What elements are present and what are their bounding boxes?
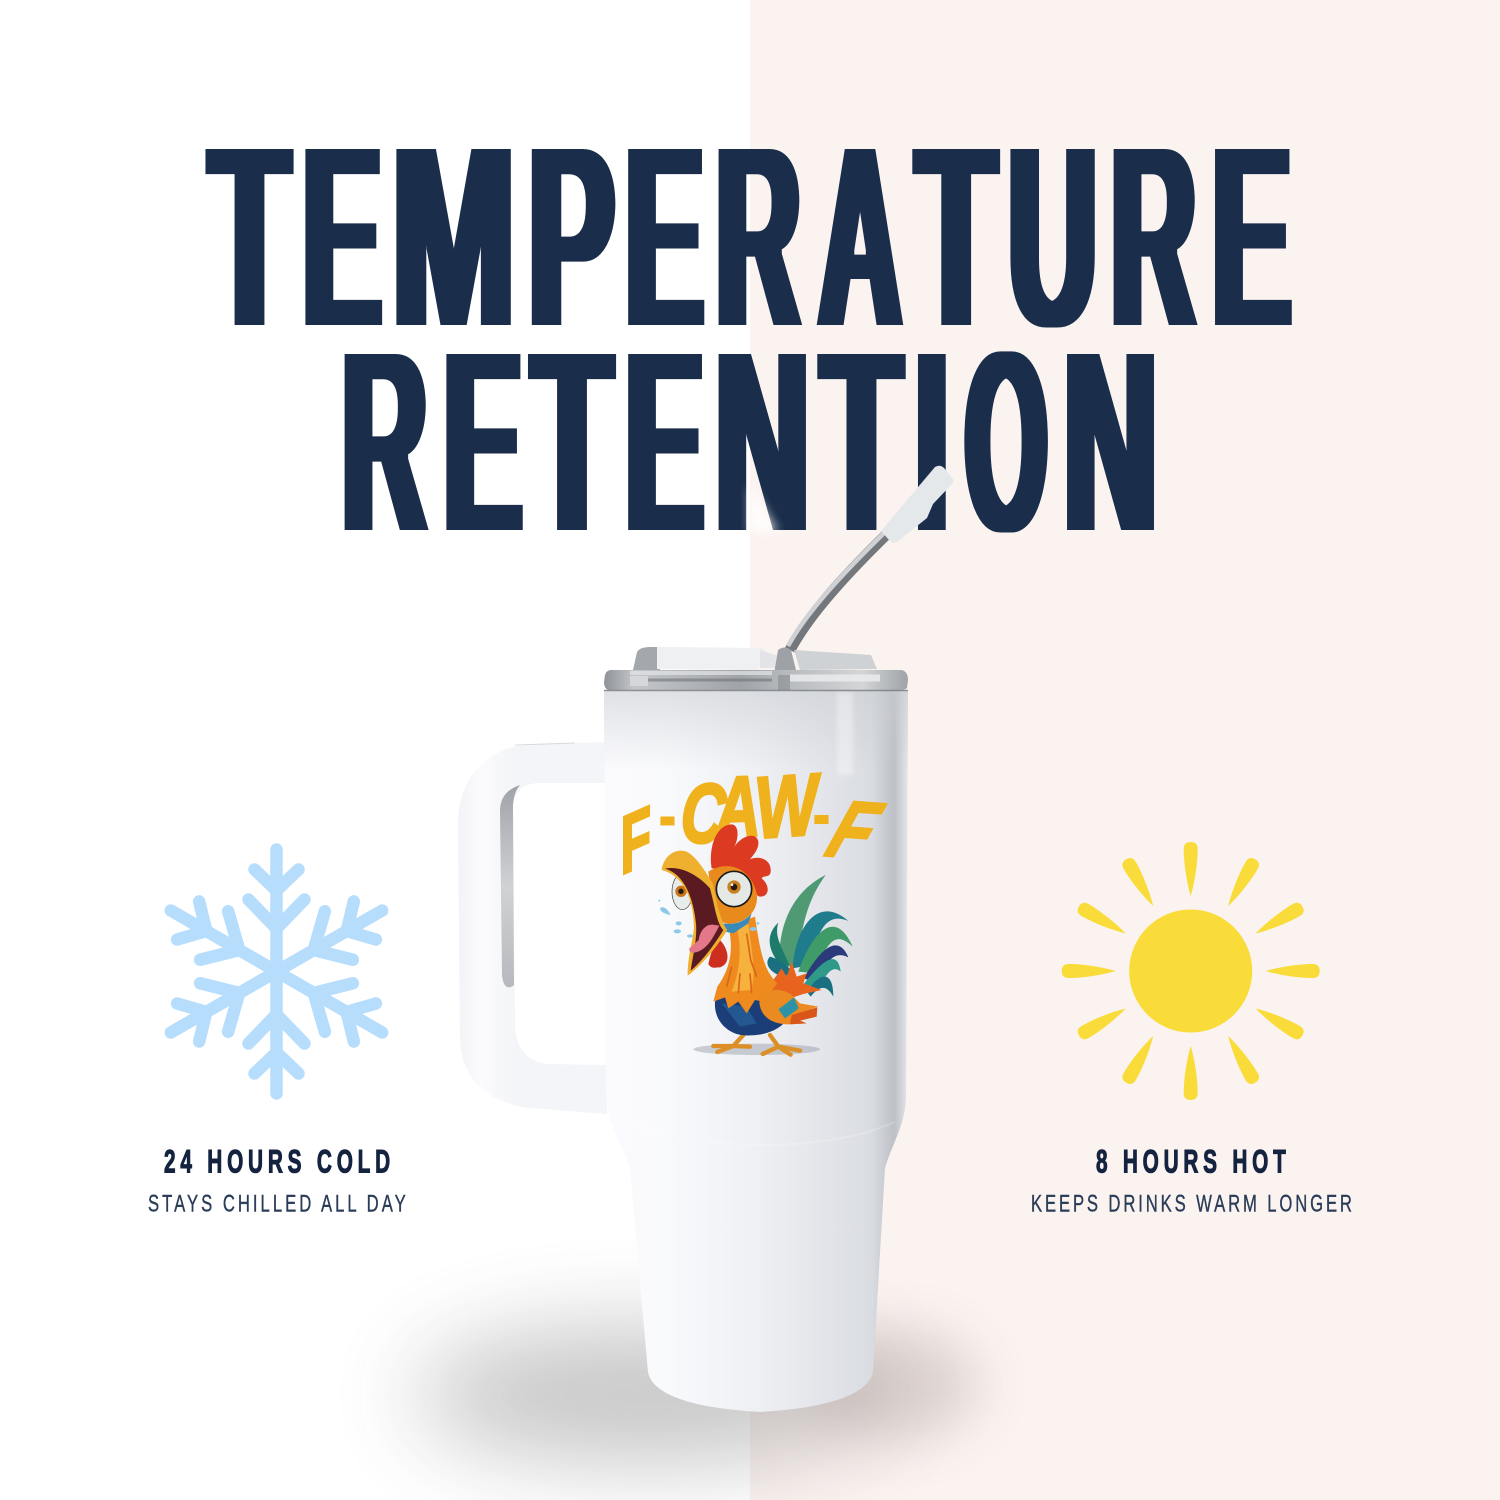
title line 1: E (1213, 91, 1291, 382)
body (604, 690, 908, 1412)
icon: sun (1062, 842, 1320, 1100)
title line 2: O (966, 297, 1047, 588)
beak and mouth (662, 851, 727, 976)
faded patch on the N (750, 485, 778, 532)
tumbler (458, 466, 953, 1412)
title line 2: E (626, 295, 703, 588)
icon: snowflake (157, 850, 396, 1094)
title line 2: T (532, 296, 612, 588)
title line 1: T (916, 90, 996, 383)
design slogan: - (814, 788, 829, 844)
far eye (672, 874, 693, 910)
left column: cold (148, 850, 406, 1217)
neck (713, 917, 777, 1013)
wattle (708, 940, 728, 968)
head (708, 866, 757, 924)
title line 2: R (342, 296, 427, 588)
title line 1: E (303, 91, 381, 382)
title line 1: T (210, 91, 290, 383)
title line 1: E (626, 90, 703, 383)
water drops (658, 900, 759, 938)
heading: 24 hours cold: 24 HOURS COLD (164, 1144, 390, 1180)
title line 2: N (715, 295, 809, 588)
caption: stays chilled: STAYS CHILLED ALL DAY (148, 1190, 406, 1217)
title line 1: R (716, 90, 800, 383)
title line 2: I (916, 295, 948, 588)
title line 2 (342, 295, 1157, 588)
title (210, 90, 1291, 588)
caption: keeps drinks warm: KEEPS DRINKS WARM LONGER (1031, 1190, 1352, 1217)
printed design (621, 756, 897, 1055)
title line 1: M (392, 92, 515, 384)
title line 2: T (821, 296, 902, 588)
title line 1: P (529, 90, 614, 383)
right column: hot (1031, 842, 1352, 1217)
design slogan: F (621, 787, 651, 893)
title line 2: N (1064, 295, 1157, 588)
design slogan: F (811, 786, 897, 875)
tail feathers (767, 875, 853, 997)
design slogan: W (752, 756, 826, 857)
design slogan: A (712, 758, 761, 855)
title line 1: U (1009, 91, 1097, 383)
title line 1: R (1111, 91, 1196, 383)
design slogan (621, 756, 897, 893)
legs (713, 1035, 800, 1055)
near eye (716, 871, 752, 907)
title line 1: A (819, 90, 901, 383)
handle (458, 742, 607, 1114)
straw (788, 466, 953, 650)
rooster (658, 824, 853, 1055)
design slogan: C (677, 763, 731, 863)
body (715, 993, 788, 1036)
heading: 8 hours hot: 8 HOURS HOT (1096, 1144, 1286, 1180)
design slogan: - (660, 790, 675, 846)
title line 2: E (444, 296, 522, 588)
title line 1 (210, 90, 1291, 384)
lid (604, 647, 908, 690)
floor shadow (415, 1327, 980, 1463)
comb (711, 824, 771, 897)
wing (759, 990, 818, 1024)
